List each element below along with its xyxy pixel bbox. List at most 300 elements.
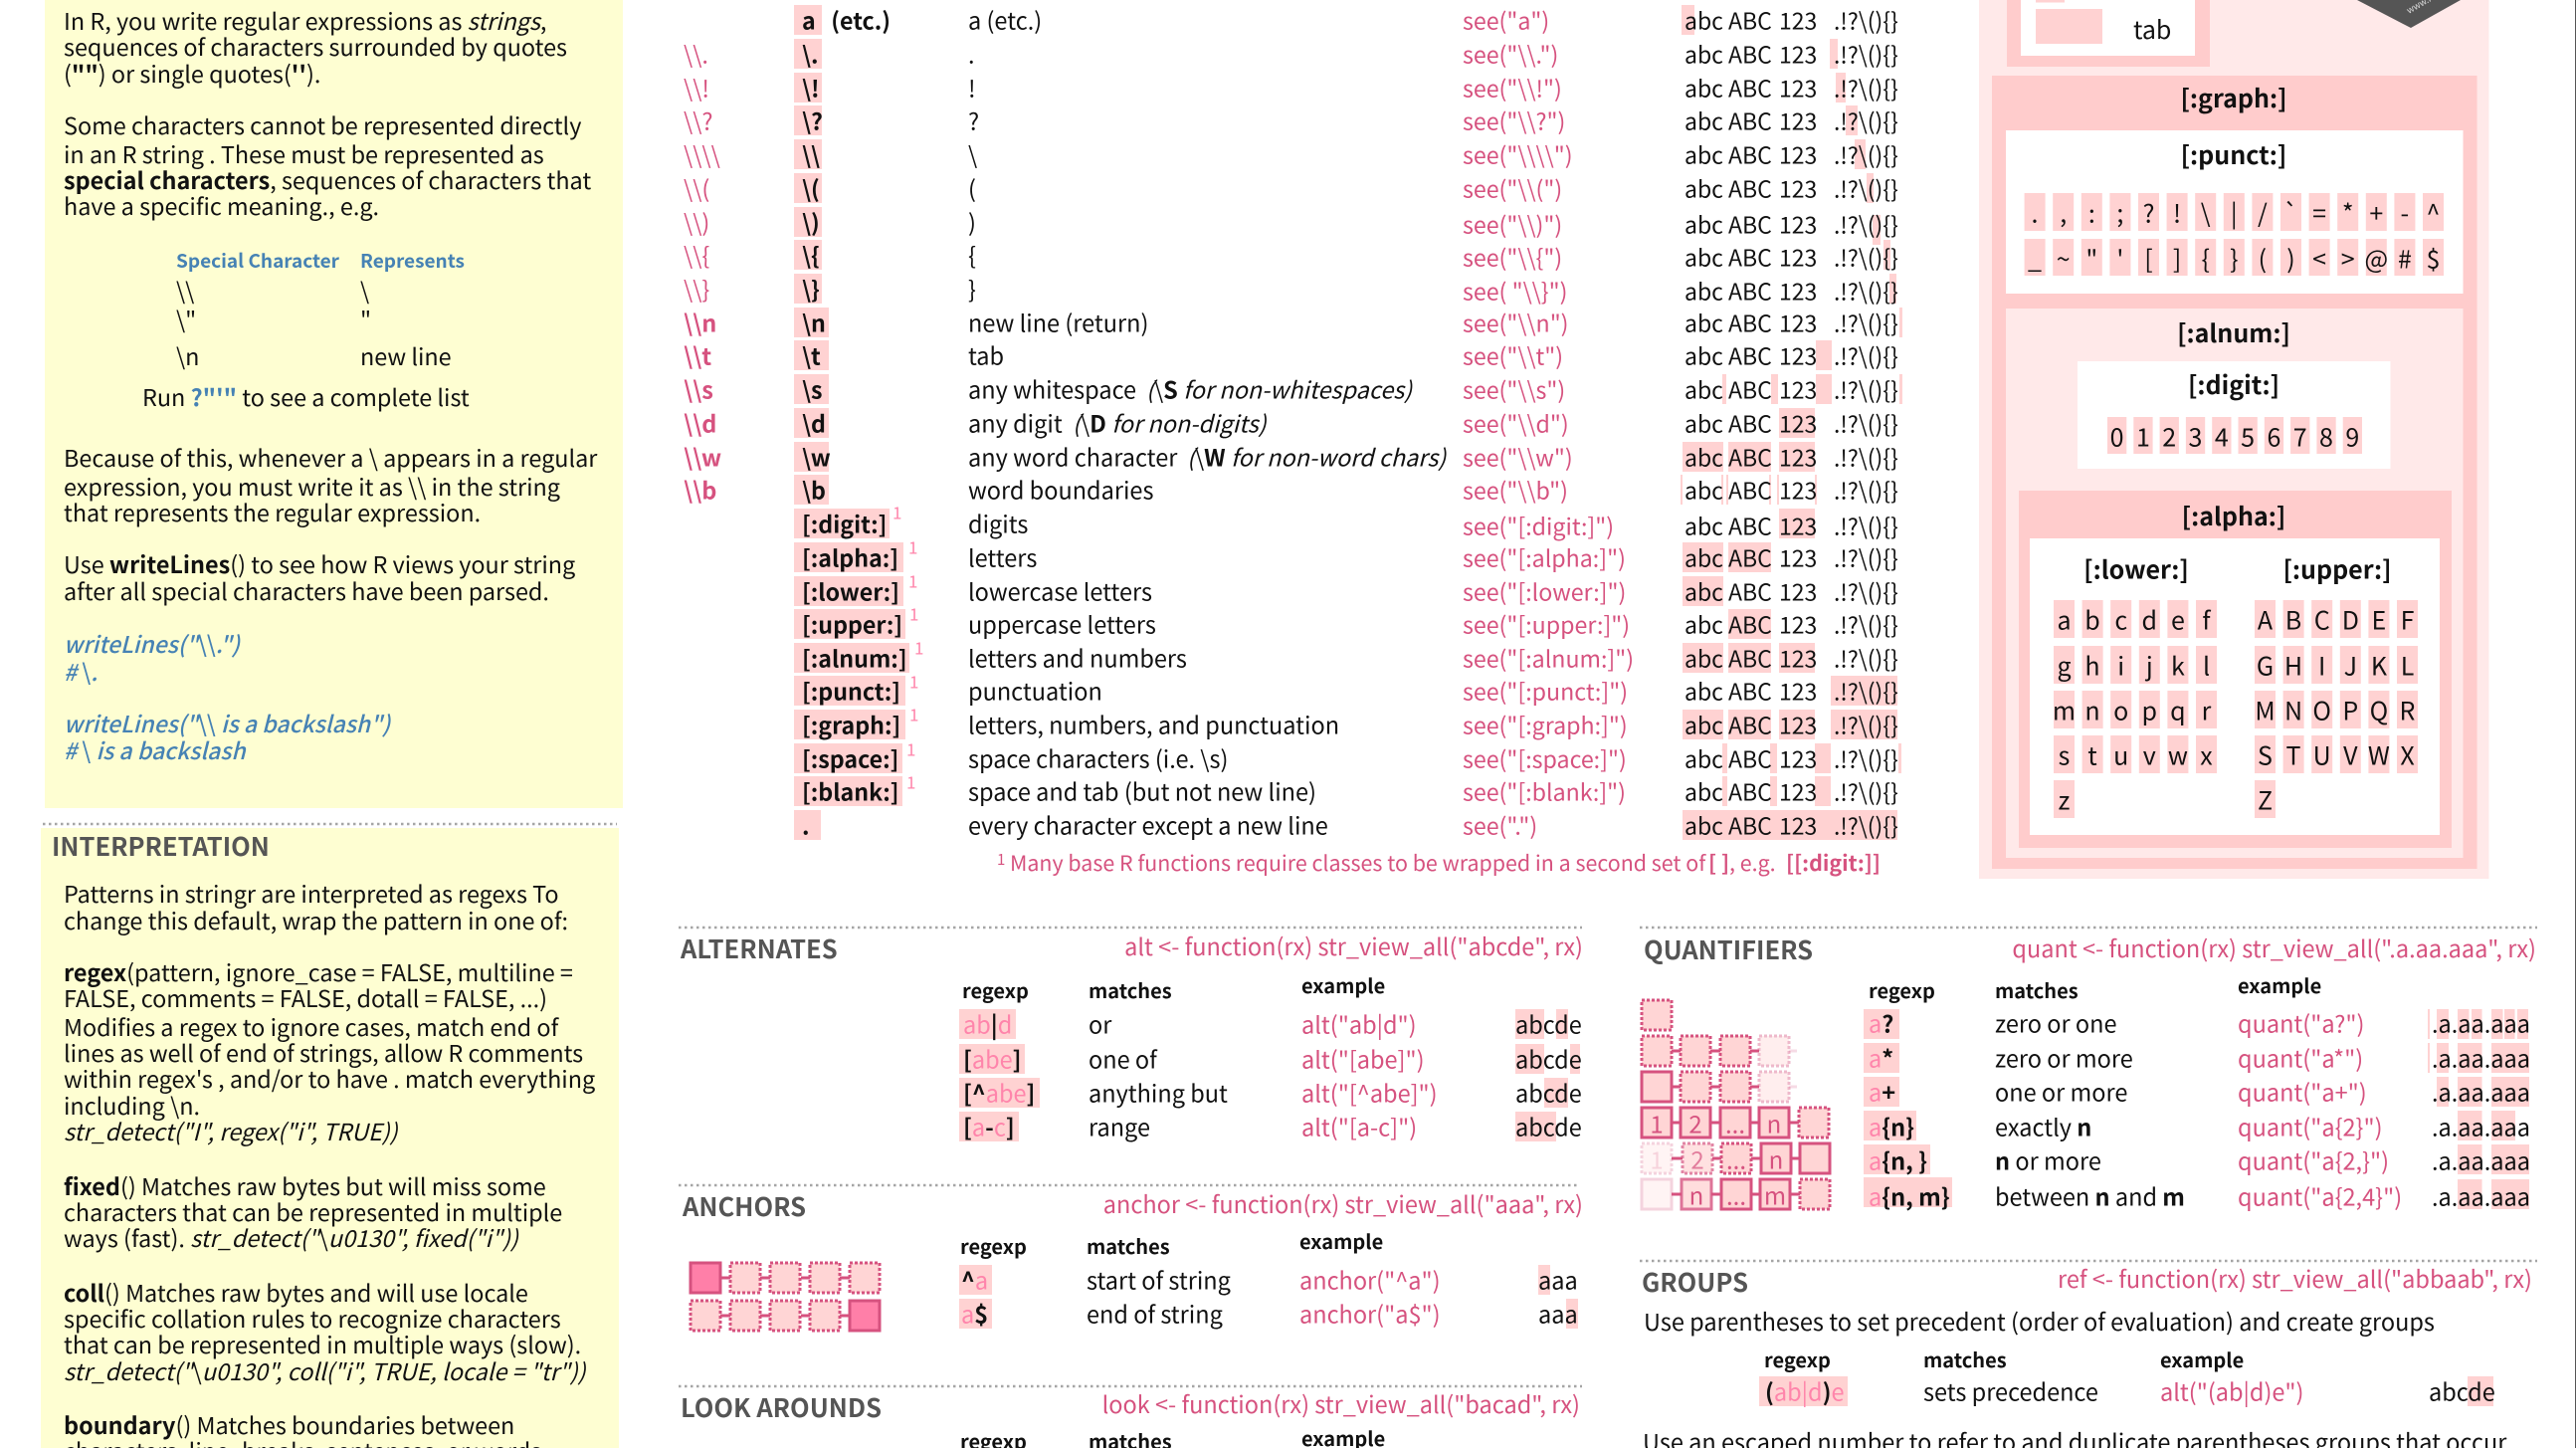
text: interpretation body: FALSE, comments = FALSE, dotall = FALSE, ...) — [64, 980, 547, 1014]
regexp column: a? — [1869, 1005, 1893, 1039]
text: interpretation body: boundary() Matches boundaries between — [64, 1407, 514, 1441]
character cells: punctuation: - — [2401, 195, 2409, 231]
character cells: punctuation: + — [2369, 195, 2383, 231]
character cells: lower: z — [2059, 782, 2071, 818]
character cells: upper: D — [2342, 601, 2359, 637]
character cells: digits: 0 — [2110, 418, 2124, 454]
character cells: upper: B — [2285, 601, 2301, 637]
column: result strings: 123 — [1779, 641, 1817, 675]
column: matches: any digit — [968, 406, 1063, 440]
character cells: punctuation: " — [2085, 241, 2097, 277]
column: regexp: \. — [802, 36, 819, 70]
column: result strings: abc — [1684, 607, 1723, 641]
column: matches: \ — [968, 137, 977, 171]
character cells: punctuation: ~ — [2057, 241, 2071, 277]
column: result strings: ABC — [1728, 539, 1772, 573]
column: matches: any word character — [968, 440, 1177, 474]
diagram: quantifiers: 2 — [1688, 1105, 1702, 1140]
column: matches: uppercase letters — [968, 607, 1156, 641]
heading: interpretation: INTERPRETATION — [52, 827, 270, 864]
character cells: lower: v — [2143, 736, 2156, 772]
character cells: punctuation: ^ — [2427, 195, 2440, 231]
matches column: end of string — [1087, 1296, 1223, 1330]
heading: alnum: [:alnum:] — [2177, 314, 2290, 350]
column: result strings: abc — [1684, 103, 1723, 137]
character cells: digits: 3 — [2189, 418, 2202, 454]
character cells: lower: t — [2087, 736, 2097, 772]
column: result strings: ABC — [1728, 103, 1772, 137]
column: matches: letters — [968, 539, 1037, 573]
box: punct — [2006, 130, 2464, 294]
column: result strings: 123 — [1779, 508, 1817, 541]
column: result strings: ABC — [1728, 305, 1772, 338]
column: string: \\d — [684, 406, 716, 440]
column: result strings: .!?\(){} — [1834, 607, 1898, 641]
table: special characters: \ — [360, 273, 369, 307]
column: result strings: 123 — [1779, 406, 1817, 440]
column: string: \\! — [684, 70, 709, 103]
column: string: \\n — [684, 305, 716, 338]
text: interpretation body: change this default, wrap the pattern in one of: — [64, 903, 568, 936]
column: string: \\s — [684, 372, 713, 406]
footnote: 1 — [997, 849, 1005, 870]
column: result strings: 123 — [1779, 273, 1817, 307]
column: regexp: \d — [802, 406, 826, 440]
character cells: lower: i — [2117, 647, 2124, 683]
column: result strings: ABC — [1728, 338, 1772, 372]
matches column: range — [1089, 1109, 1150, 1142]
result column: aaa — [1538, 1296, 1578, 1330]
column: regexp: [:alnum:] — [802, 641, 907, 675]
result column: .a.aa.aaa — [2432, 1075, 2530, 1109]
column: result strings: 123 — [1779, 573, 1817, 607]
column: regexp: \n — [802, 305, 826, 338]
text: parentheses intro: Use parentheses to set precedent (order of evaluation) and create groups — [1644, 1304, 2435, 1338]
regexp column: a{n, } — [1869, 1142, 1927, 1176]
character cells: lower: l — [2203, 647, 2210, 683]
heading: alternates: ALTERNATES — [680, 930, 838, 966]
character cells: upper: K — [2371, 647, 2388, 683]
column: example: see(".") — [1463, 808, 1537, 842]
column: result strings: .!?\(){} — [1834, 472, 1898, 506]
table: character classes — [684, 2, 1902, 878]
column: result strings: .!?\(){} — [1834, 70, 1898, 103]
column: regexp: \\ — [802, 137, 820, 171]
column: result strings: ABC — [1728, 36, 1772, 70]
diagram: quantifiers: 1 — [1650, 1140, 1664, 1176]
column: example: see("[:digit:]") — [1463, 508, 1614, 541]
column: result strings: ABC — [1728, 70, 1772, 103]
column: result strings: abc — [1684, 808, 1723, 842]
column: result strings: abc — [1684, 508, 1723, 541]
text: interpretation body: including \n. — [64, 1088, 200, 1122]
column: result strings: 123 — [1779, 338, 1817, 372]
column: result strings: .!?\(){} — [1834, 372, 1898, 406]
result column: abcde — [1515, 1109, 1582, 1142]
diagram: quantifiers: ... — [1725, 1105, 1745, 1140]
column: result strings: 123 — [1779, 372, 1817, 406]
column: regexp: \{ — [802, 237, 820, 271]
table headers: matches — [1995, 975, 2079, 1004]
text: strings intro: have a specific meaning., e.g. — [64, 188, 379, 222]
column: result strings: .!?\(){} — [1834, 673, 1898, 707]
character cells: lower: q — [2170, 693, 2186, 728]
text: strings intro — [64, 3, 591, 222]
table: special characters — [176, 247, 465, 372]
column: result strings: 123 — [1779, 740, 1817, 774]
diagram: quantifiers: n — [1689, 1176, 1703, 1212]
diagram: quantifiers: n — [1769, 1140, 1783, 1176]
regexp column: a{n} — [1869, 1109, 1914, 1142]
footnote: [[:digit:]] — [1786, 847, 1881, 878]
character cells: punctuation: [ — [2144, 241, 2153, 277]
column: regexp: [:blank:] — [802, 774, 899, 808]
character cells: lower: d — [2142, 601, 2157, 637]
column: regexp: . — [802, 808, 810, 842]
column: result strings: ABC — [1728, 137, 1772, 171]
column: matches: (\W for non-word chars) — [1187, 440, 1446, 474]
result column: .a.aa.aaa — [2432, 1178, 2530, 1212]
column: result strings: abc — [1684, 137, 1723, 171]
regexp column: a$ — [961, 1296, 988, 1330]
example column: anchor("^a") — [1299, 1262, 1441, 1296]
character cells: punctuation: } — [2230, 241, 2239, 277]
code: writeLines examples: writeLines("\\.") — [64, 626, 242, 660]
character cells: upper: W — [2368, 736, 2390, 772]
table headers: example — [2238, 970, 2321, 999]
column: result strings: abc — [1684, 406, 1723, 440]
column: example: see("[:upper:]") — [1463, 607, 1630, 641]
matches column: between n and m — [1995, 1178, 2185, 1212]
heading: quantifiers: QUANTIFIERS — [1644, 931, 1813, 967]
group precedence row: sets precedence — [1923, 1373, 2098, 1407]
column: result strings: .!?\(){} — [1834, 103, 1898, 137]
example column — [1301, 1007, 1438, 1142]
character cells: upper: X — [2400, 736, 2415, 772]
column: result strings: 123 — [1779, 2, 1817, 36]
panel: class hierarchy — [1979, 0, 2489, 879]
character cells: punctuation: $ — [2427, 241, 2440, 277]
column: string: \\b — [684, 472, 716, 506]
table headers: regexp — [960, 1231, 1027, 1260]
example column: quant("a{2,4}") — [2238, 1178, 2402, 1212]
column: result strings: abc — [1684, 539, 1723, 573]
character cells: lower: m — [2053, 693, 2076, 728]
example column — [2238, 1005, 2402, 1212]
column: matches: letters and numbers — [968, 641, 1187, 675]
column: regexp: 1 — [909, 669, 918, 693]
column: string: \\w — [684, 440, 721, 474]
character cells: punctuation: : — [2088, 195, 2095, 231]
regexp column: ^a — [961, 1262, 988, 1296]
character cells: lower — [2053, 551, 2217, 818]
heading: anchors: ANCHORS — [682, 1187, 806, 1224]
column: string: \\} — [684, 271, 709, 305]
text: strings intro: In R, you write regular expressions as strings, — [64, 3, 546, 37]
column: regexp: \w — [802, 440, 831, 474]
character cells: punctuation: ( — [2259, 241, 2267, 277]
example column: quant("a{2,}") — [2238, 1142, 2389, 1176]
regexp column: [^abe] — [963, 1075, 1035, 1109]
column: result strings: .!?\(){} — [1834, 137, 1898, 171]
column: regexp: [:graph:] — [802, 707, 900, 740]
column: example: see("\\(") — [1463, 171, 1562, 205]
heading: alpha: [:alpha:] — [2182, 498, 2285, 533]
text: interpretation body: str_detect("\u0130", coll("i", TRUE, locale = "tr")) — [64, 1353, 587, 1387]
matches column: anything but — [1089, 1075, 1228, 1109]
column: matches: ) — [968, 205, 976, 239]
column: result strings: ABC — [1728, 808, 1772, 842]
character cells: lower: h — [2084, 647, 2100, 683]
table headers: matches — [1923, 1345, 2007, 1373]
code: writeLines examples: writeLines("\\ is a backslash") — [64, 706, 392, 739]
column: example: see("\\w") — [1463, 440, 1573, 474]
column: result strings: abc — [1684, 472, 1723, 506]
section: groups — [1642, 1261, 2532, 1448]
character cells: punctuation: ; — [2116, 195, 2123, 231]
column: regexp: 1 — [908, 567, 917, 593]
column: regexp: [:lower:] — [802, 573, 899, 607]
column: result strings: abc — [1684, 338, 1723, 372]
footnote: , e.g. — [1729, 847, 1776, 878]
column: result strings: 123 — [1779, 774, 1817, 808]
column: result strings: .!?\(){} — [1834, 305, 1898, 338]
text: strings intro: in an R string . These must be represented as — [64, 136, 544, 170]
column: result strings: 123 — [1779, 171, 1817, 205]
column: example: see("\\?") — [1463, 103, 1565, 137]
column: result strings: ABC — [1728, 472, 1772, 506]
column: matches: new line (return) — [968, 305, 1148, 338]
column: matches: ! — [968, 70, 976, 103]
character cells: punctuation: _ — [2028, 241, 2042, 277]
column: result strings: abc — [1684, 239, 1723, 273]
example column: quant("a?") — [2238, 1005, 2364, 1039]
legend: space and tab box — [2007, 0, 2210, 67]
regexp column — [959, 1007, 1040, 1142]
character cells: punctuation: * — [2342, 195, 2354, 231]
column: result strings: 123 — [1779, 808, 1817, 842]
column: result strings: 123 — [1779, 440, 1817, 474]
character cells: lower: e — [2171, 601, 2185, 637]
result column: .a.aa.aaa — [2432, 1109, 2530, 1142]
column: regexp: 1 — [914, 635, 923, 659]
text: backslash note — [64, 440, 598, 607]
column: result strings: .!?\(){} — [1834, 808, 1898, 842]
character cells: upper: I — [2318, 647, 2325, 683]
character cells: lower: u — [2113, 736, 2128, 772]
column: matches: punctuation — [968, 673, 1102, 707]
column: example: see("\\t") — [1463, 338, 1563, 372]
column: example — [1463, 2, 1634, 842]
text: interpretation body: str_detect("I", regex("i", TRUE)) — [64, 1114, 399, 1147]
column: regexp: \! — [802, 70, 820, 103]
character cells: punctuation: \ — [2201, 195, 2211, 231]
character cells: digits: 8 — [2319, 418, 2333, 454]
column: example: see("\\n") — [1463, 305, 1569, 338]
code: alt helper: alt <- function(rx) str_view_all("abcde", rx) — [1124, 929, 1583, 962]
result column: .a.aa.aaa — [2432, 1005, 2530, 1039]
group precedence row: (ab|d)e — [1765, 1373, 1844, 1407]
character cells: upper: A — [2258, 601, 2274, 637]
group precedence row: alt("(ab|d)e") — [2160, 1373, 2304, 1407]
character cells: upper: U — [2313, 736, 2331, 772]
character cells: lower: b — [2084, 601, 2100, 637]
result column: abcde — [1515, 1007, 1582, 1041]
column: result strings: abc — [1684, 2, 1723, 36]
diagram: quantifiers: ... — [1726, 1176, 1746, 1212]
matches column: n or more — [1995, 1142, 2101, 1176]
column: regexp: \) — [802, 205, 820, 239]
column: example: see("\\{") — [1463, 239, 1562, 273]
group precedence row: abcde — [2429, 1373, 2495, 1407]
column: result strings: .!?\(){} — [1834, 641, 1898, 675]
table headers: matches — [1089, 975, 1172, 1004]
column: result strings: .!?\(){} — [1834, 2, 1898, 36]
example column: alt("[a-c]") — [1301, 1109, 1417, 1142]
column: matches: ? — [968, 103, 979, 137]
column: regexp: [:space:] — [802, 740, 898, 774]
diagram: quantifiers: m — [1764, 1176, 1786, 1212]
character cells: punctuation — [2025, 193, 2444, 277]
column: result strings: .!?\(){} — [1834, 774, 1898, 808]
diagram: anchors — [691, 1263, 880, 1331]
character cells: punctuation: / — [2258, 195, 2268, 231]
column: result strings: 123 — [1779, 539, 1817, 573]
column: example: see("\\d") — [1463, 406, 1569, 440]
diagram: quantifiers: 1 — [1650, 1105, 1664, 1140]
column: regexp: \b — [802, 472, 826, 506]
column: regexp: a — [802, 2, 816, 36]
character cells: punctuation: > — [2341, 241, 2355, 277]
code: ref helper: ref <- function(rx) str_view_all("abbaab", rx) — [2058, 1261, 2532, 1295]
column: result strings: ABC — [1728, 573, 1772, 607]
column: example: see("[:space:]") — [1463, 740, 1627, 774]
column: regexp: 1 — [908, 533, 917, 559]
character cells: punctuation: , — [2060, 195, 2067, 231]
column: result strings: .!?\(){} — [1834, 36, 1898, 70]
character cells: punctuation: = — [2312, 195, 2326, 231]
column: result strings: ABC — [1728, 207, 1772, 241]
column: string — [684, 36, 721, 506]
column: example: see( "\\}") — [1463, 273, 1567, 307]
column: matches: digits — [968, 506, 1028, 539]
table headers — [960, 1423, 1385, 1448]
column: matches: any whitespace — [968, 372, 1136, 406]
code: writeLines examples — [64, 626, 392, 766]
text: interpretation body: fixed() Matches raw bytes but will miss some — [64, 1168, 546, 1202]
column: result strings: ABC — [1728, 673, 1772, 707]
example column: quant("a{2}") — [2238, 1109, 2383, 1142]
character cells: digits — [2107, 417, 2362, 454]
character cells: upper: [:upper:] — [2282, 551, 2392, 587]
text: backslash note: expression, you must write it as \\ in the string — [64, 469, 560, 503]
column: example: see("[:punct:]") — [1463, 673, 1628, 707]
example column: alt("ab|d") — [1301, 1007, 1417, 1041]
column: regexp: \s — [802, 372, 822, 406]
character cells: lower: s — [2059, 736, 2070, 772]
character cells: punctuation: ? — [2143, 195, 2154, 231]
heading: digit: [:digit:] — [2188, 366, 2279, 402]
matches column: zero or more — [1995, 1041, 2133, 1075]
column: regexp: \} — [802, 271, 820, 305]
table: special characters: new line — [360, 338, 452, 372]
column: matches: . — [968, 36, 975, 70]
column: example: see("[:lower:]") — [1463, 573, 1626, 607]
column: result strings: ABC — [1728, 607, 1772, 641]
example column: alt("[abe]") — [1301, 1041, 1425, 1075]
column: matches: word boundaries — [968, 472, 1153, 506]
regexp column: a+ — [1869, 1075, 1895, 1109]
matches column: zero or one — [1995, 1005, 2117, 1039]
column: string: \\{ — [684, 237, 709, 271]
example column: quant("a+") — [2238, 1075, 2367, 1109]
result column: .a.aa.aaa — [2432, 1041, 2530, 1075]
column: result strings: abc — [1684, 171, 1723, 205]
column: result strings: ABC — [1728, 774, 1772, 808]
table: special characters: \" — [176, 302, 196, 335]
column: matches: every character except a new line — [968, 808, 1328, 842]
character cells: digits: 6 — [2267, 418, 2280, 454]
table: special characters: Represents — [360, 247, 465, 274]
column: example: see("\\\\") — [1463, 137, 1573, 171]
column: result strings: .!?\(){} — [1834, 406, 1898, 440]
character cells: punctuation: ) — [2286, 241, 2295, 277]
heading: punct: [:punct:] — [2181, 136, 2286, 172]
result column: abcde — [1515, 1041, 1582, 1075]
column: result strings: ABC — [1728, 372, 1772, 406]
character cells: lower: a — [2057, 601, 2072, 637]
regexp column: [abe] — [963, 1041, 1022, 1075]
matches column: one of — [1089, 1041, 1158, 1075]
column: matches: letters, numbers, and punctuation — [968, 707, 1339, 740]
column: result strings: .!?\(){} — [1834, 273, 1898, 307]
character cells: punctuation: { — [2201, 241, 2210, 277]
column: regexp: [:alpha:] — [802, 539, 898, 573]
column: result strings: ABC — [1728, 707, 1772, 740]
column: result strings: abc — [1684, 305, 1723, 338]
column: example: see("[:alpha:]") — [1463, 539, 1626, 573]
column: result strings: ABC — [1728, 171, 1772, 205]
panel: interpretation — [41, 827, 619, 1448]
column: result strings: abc — [1684, 207, 1723, 241]
text: backslash note: Because of this, whenever a \ appears in a regular — [64, 440, 598, 474]
regexp column — [959, 1262, 992, 1330]
column: matches: space and tab (but not new line) — [968, 774, 1316, 808]
column: example: see("\\)") — [1463, 207, 1562, 241]
column: string: \\? — [684, 103, 713, 137]
table: special characters: Special Character — [176, 247, 340, 274]
text: strings intro: Some characters cannot be represented directly — [64, 107, 581, 141]
text: interpretation body: ways (fast). str_detect("\u0130", fixed("i")) — [64, 1220, 519, 1254]
table headers: regexp — [1764, 1345, 1831, 1373]
column: result strings: .!?\(){} — [1834, 707, 1898, 740]
result column — [1538, 1262, 1578, 1330]
column: result strings: .!?\(){} — [1834, 508, 1898, 541]
character cells: lower: x — [2200, 736, 2213, 772]
column: result strings: 123 — [1779, 36, 1817, 70]
column: result strings — [1684, 2, 1898, 842]
column: regexp: 1 — [892, 500, 901, 523]
code: writeLines examples: # \. — [64, 654, 98, 688]
column: example: see("\\.") — [1463, 36, 1558, 70]
regexp column — [1864, 1005, 1952, 1212]
column: example: see("[:blank:]") — [1463, 774, 1626, 808]
table headers — [1869, 970, 2321, 1004]
column: result strings: 123 — [1779, 137, 1817, 171]
column: result strings: ABC — [1728, 641, 1772, 675]
table headers — [960, 1226, 1383, 1260]
character cells: punctuation: | — [2231, 195, 2238, 231]
